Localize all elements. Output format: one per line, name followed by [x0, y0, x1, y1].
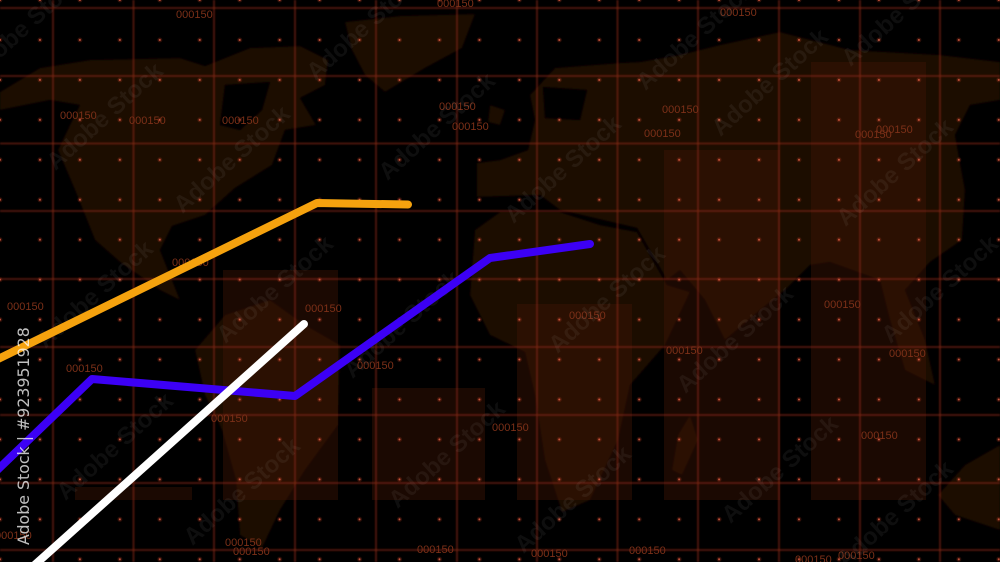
watermarks: Adobe Stock — [671, 280, 799, 399]
watermarks: Adobe Stock — [499, 110, 627, 229]
watermarks: Adobe Stock — [543, 240, 671, 359]
map: Australia — [938, 445, 1000, 530]
numeric labels: 000150 — [172, 257, 209, 269]
numeric labels: 000150 — [357, 360, 394, 372]
numeric labels: 000150 — [492, 422, 529, 434]
map: Africa — [470, 212, 690, 512]
numeric labels: 000150 — [876, 124, 913, 136]
watermarks: Adobe Stock — [338, 265, 466, 384]
numeric labels: 000150 — [222, 115, 259, 127]
bar 1 — [75, 487, 192, 500]
numeric labels: 000150 — [644, 128, 681, 140]
numeric labels: 000150 — [838, 550, 875, 562]
bar 2 — [223, 270, 338, 500]
numeric labels: 000150 — [720, 7, 757, 19]
bar 6 — [811, 62, 926, 500]
numeric labels: 000150 — [569, 310, 606, 322]
watermarks: Adobe Stock — [383, 395, 511, 514]
watermarks: Adobe Stock — [178, 432, 306, 551]
watermarks: Adobe Stock — [41, 57, 169, 176]
map: Britain — [488, 105, 505, 125]
numeric labels: 000150 — [60, 110, 97, 122]
numeric labels: 000150 — [417, 544, 454, 556]
watermarks: Adobe Stock — [168, 100, 296, 219]
watermarks: Adobe Stock — [831, 113, 959, 232]
numeric labels: 000150 — [7, 301, 44, 313]
white line — [29, 324, 304, 562]
numeric labels: 000150 — [439, 101, 476, 113]
numeric labels: 000150 — [531, 548, 568, 560]
numeric labels: 000150 — [225, 537, 262, 549]
map: North America — [0, 46, 328, 300]
bar 4 — [517, 304, 632, 500]
numeric labels: 000150 — [861, 430, 898, 442]
bar 5 — [664, 150, 780, 500]
numeric labels: 000150 — [662, 104, 699, 116]
numeric labels: 000150 — [889, 348, 926, 360]
map: Eurasia — [477, 32, 1000, 385]
watermarks: Adobe Stock — [51, 387, 179, 506]
numeric labels: 000150 — [666, 345, 703, 357]
numeric labels: 000150 — [824, 299, 861, 311]
numeric labels: 000150 — [176, 9, 213, 21]
watermarks: Adobe Stock — [876, 230, 1000, 349]
watermarks: Adobe Stock — [31, 235, 159, 354]
numeric labels: 000150 — [855, 129, 892, 141]
watermarks: Adobe Stock — [509, 440, 637, 559]
bar 3 — [372, 388, 485, 500]
numeric labels: 000150 — [305, 303, 342, 315]
numeric labels: 000150 — [129, 115, 166, 127]
line chart — [0, 203, 590, 562]
watermarks: Adobe Stock — [706, 23, 834, 142]
numeric labels: 000150 — [233, 546, 270, 558]
watermarks: Adobe Stock — [211, 230, 339, 349]
background bar chart — [75, 62, 926, 500]
stock id watermark: Adobe Stock | #923951928 — [14, 327, 33, 545]
numeric labels: 000150 — [452, 121, 489, 133]
blue line — [0, 244, 590, 477]
map: Greenland — [345, 14, 475, 92]
orange line — [0, 203, 408, 363]
map: South America — [195, 300, 340, 548]
numeric labels: 000150 — [629, 545, 666, 557]
map: Madagascar — [672, 415, 698, 475]
watermarks: Adobe Stock — [373, 67, 501, 186]
numeric labels: 000150 — [66, 363, 103, 375]
watermarks: Adobe Stock — [716, 410, 844, 529]
numeric labels: 000150 — [211, 413, 248, 425]
